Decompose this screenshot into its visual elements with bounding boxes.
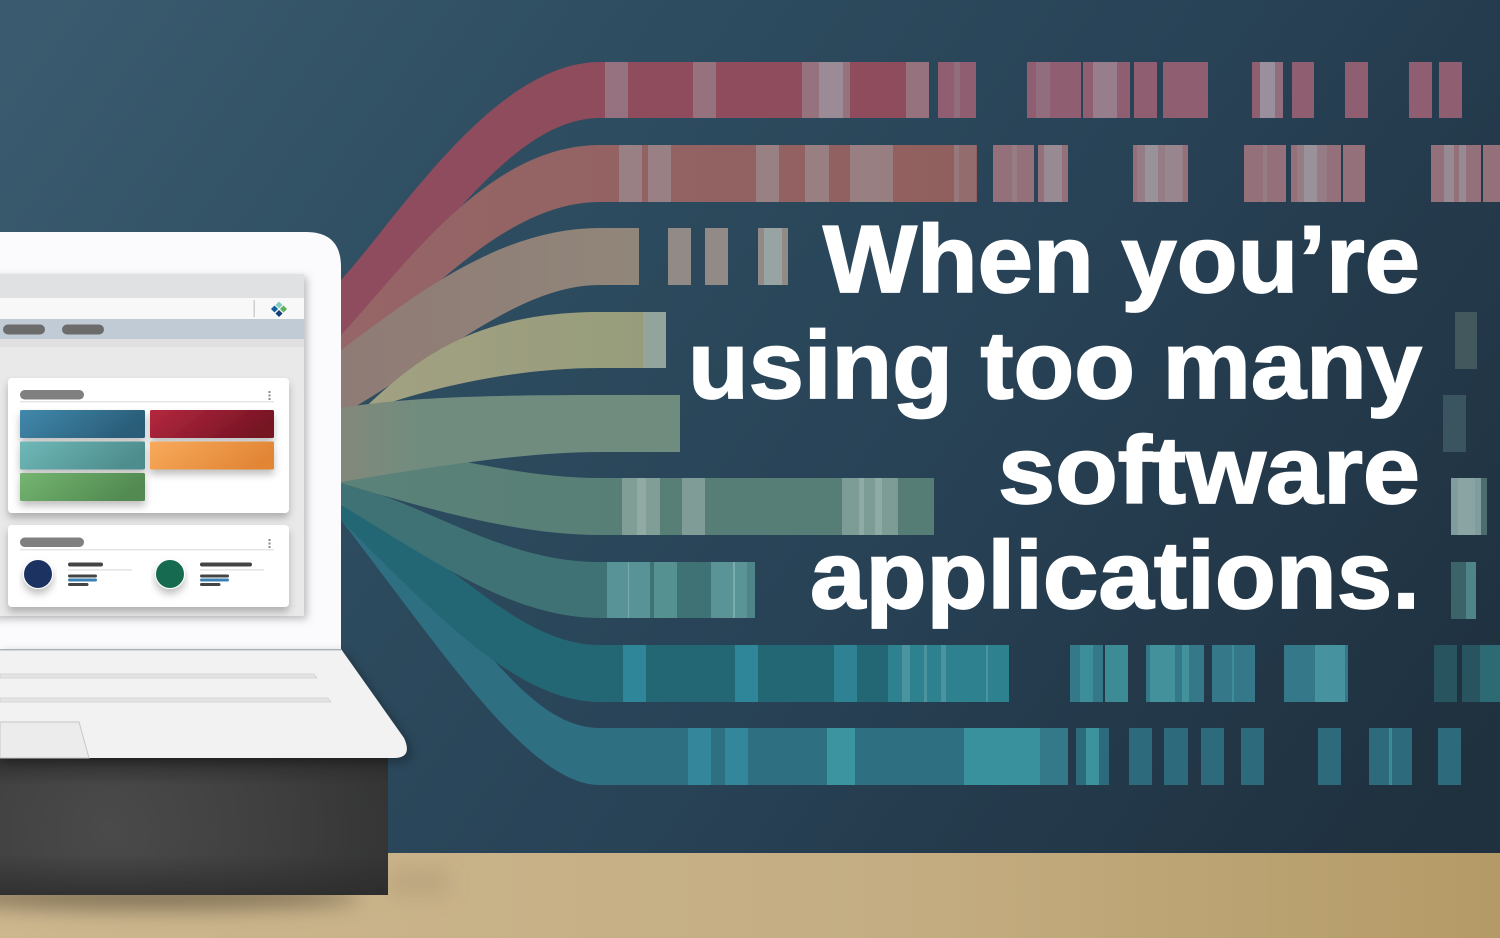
text lines xyxy=(68,562,264,586)
card: people xyxy=(8,525,289,607)
headline: using too many xyxy=(688,312,1422,419)
laptop shadow on desk xyxy=(0,868,448,910)
headline: applications. xyxy=(810,522,1420,629)
band row 2: salmon xyxy=(341,145,1500,372)
headline: When you’re xyxy=(823,206,1420,313)
headline xyxy=(688,206,1422,629)
band row 8: deep teal xyxy=(341,505,1500,702)
band row 3: tan xyxy=(341,228,788,415)
band row 5: sage xyxy=(341,395,1466,482)
band row 7: muted teal xyxy=(341,483,1476,619)
app window xyxy=(0,274,304,616)
colored tiles xyxy=(20,410,274,501)
laptop xyxy=(0,232,407,895)
laptop lower body xyxy=(0,758,388,895)
headline: software xyxy=(998,417,1420,524)
logo icon xyxy=(271,301,287,317)
laptop screen lid xyxy=(0,232,341,650)
band row 1: red xyxy=(341,62,1462,350)
laptop keyboard deck xyxy=(0,649,407,758)
card: tiles xyxy=(8,378,289,513)
band row 4: olive xyxy=(341,312,1477,430)
band row 6: green teal xyxy=(341,440,1487,535)
desk surface xyxy=(0,853,1500,938)
avatar: green xyxy=(156,560,184,588)
nav pills xyxy=(3,324,104,334)
band row 9: blue teal xyxy=(341,510,1461,785)
trackpad xyxy=(0,722,89,758)
avatar: navy xyxy=(24,560,52,588)
